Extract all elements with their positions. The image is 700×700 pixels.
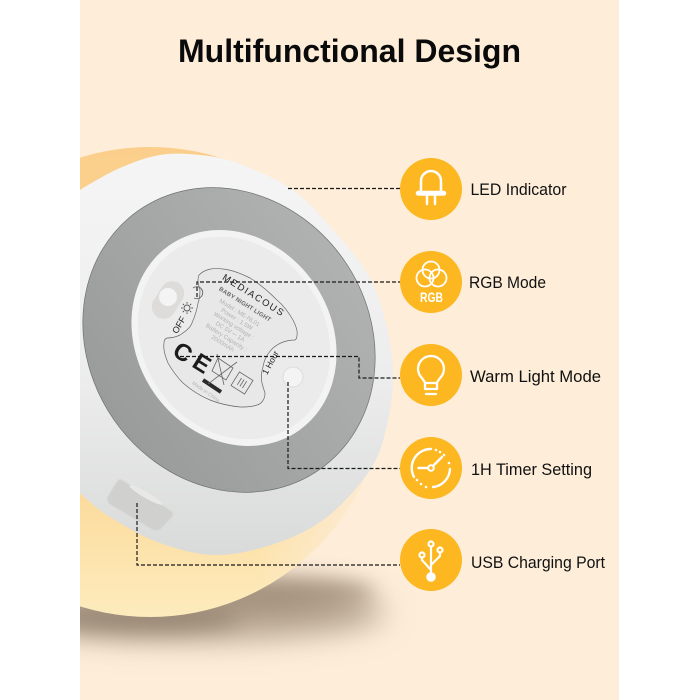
CE mark — [174, 344, 212, 374]
OFF label: OFF — [170, 314, 188, 335]
label text — [206, 274, 284, 352]
grey ring — [82, 187, 376, 493]
label text: MEDIACOUS — [220, 272, 285, 319]
CE mark: C — [168, 337, 197, 369]
floor shadow — [0, 577, 385, 640]
timer mark — [193, 287, 203, 299]
line: warm light mode — [180, 356, 400, 378]
glowing lamp body — [80, 147, 364, 617]
white base — [70, 154, 393, 555]
line: USB port — [137, 503, 400, 565]
sun icon — [181, 302, 193, 314]
feature: Warm Light Mode: Warm Light Mode — [470, 368, 601, 386]
feature: RGB Mode — [400, 251, 546, 313]
icon: RGB circles: RGB — [420, 289, 443, 305]
line: RGB mode — [197, 282, 400, 297]
line: timer — [288, 382, 400, 468]
CE mark: E — [188, 348, 215, 380]
feature: RGB Mode: RGB Mode — [469, 274, 546, 292]
power switch — [152, 282, 184, 319]
icon: timer clock — [400, 437, 462, 499]
timer button — [283, 367, 303, 387]
disposal bar — [203, 380, 221, 392]
USB port — [107, 479, 173, 531]
icon: RGB circles — [400, 251, 462, 313]
label sticker outline — [164, 269, 297, 407]
1 Hour label: 1 Hour — [260, 349, 281, 376]
label text: Working voltage : — [212, 312, 255, 341]
diamond mark — [231, 372, 253, 394]
feature: 1H Timer Setting — [400, 437, 592, 499]
label text: Battery Capacity : — [204, 323, 248, 354]
label text: Model : ME-NL01 — [218, 299, 261, 329]
label text: Power : 1.5W — [219, 308, 253, 332]
connector lines — [137, 188, 400, 565]
night light product — [80, 147, 394, 658]
line: LED indicator — [288, 188, 400, 190]
background panel — [80, 0, 619, 700]
feature: 1H Timer Setting: 1H Timer Setting — [471, 461, 592, 479]
made in China: Made in China — [191, 380, 221, 404]
feature: USB Charging Port — [400, 529, 605, 591]
icon: USB trident — [400, 529, 462, 591]
feature: Warm Light Mode — [400, 344, 601, 406]
feature: USB Charging Port: USB Charging Port — [471, 554, 605, 572]
inner disc — [132, 230, 336, 446]
label text: DC 5V ⎓ 1A — [214, 321, 245, 344]
feature: LED Indicator — [400, 158, 567, 220]
label text: BABY NIGHT LIGHT — [217, 287, 272, 324]
feature: LED Indicator: LED Indicator — [470, 181, 567, 199]
crossed bin icon — [208, 354, 237, 385]
icon: LED — [400, 158, 462, 220]
label text: 2000mAh — [210, 335, 235, 354]
title: Multifunctional Design — [178, 33, 521, 69]
icon: light bulb — [400, 344, 462, 406]
